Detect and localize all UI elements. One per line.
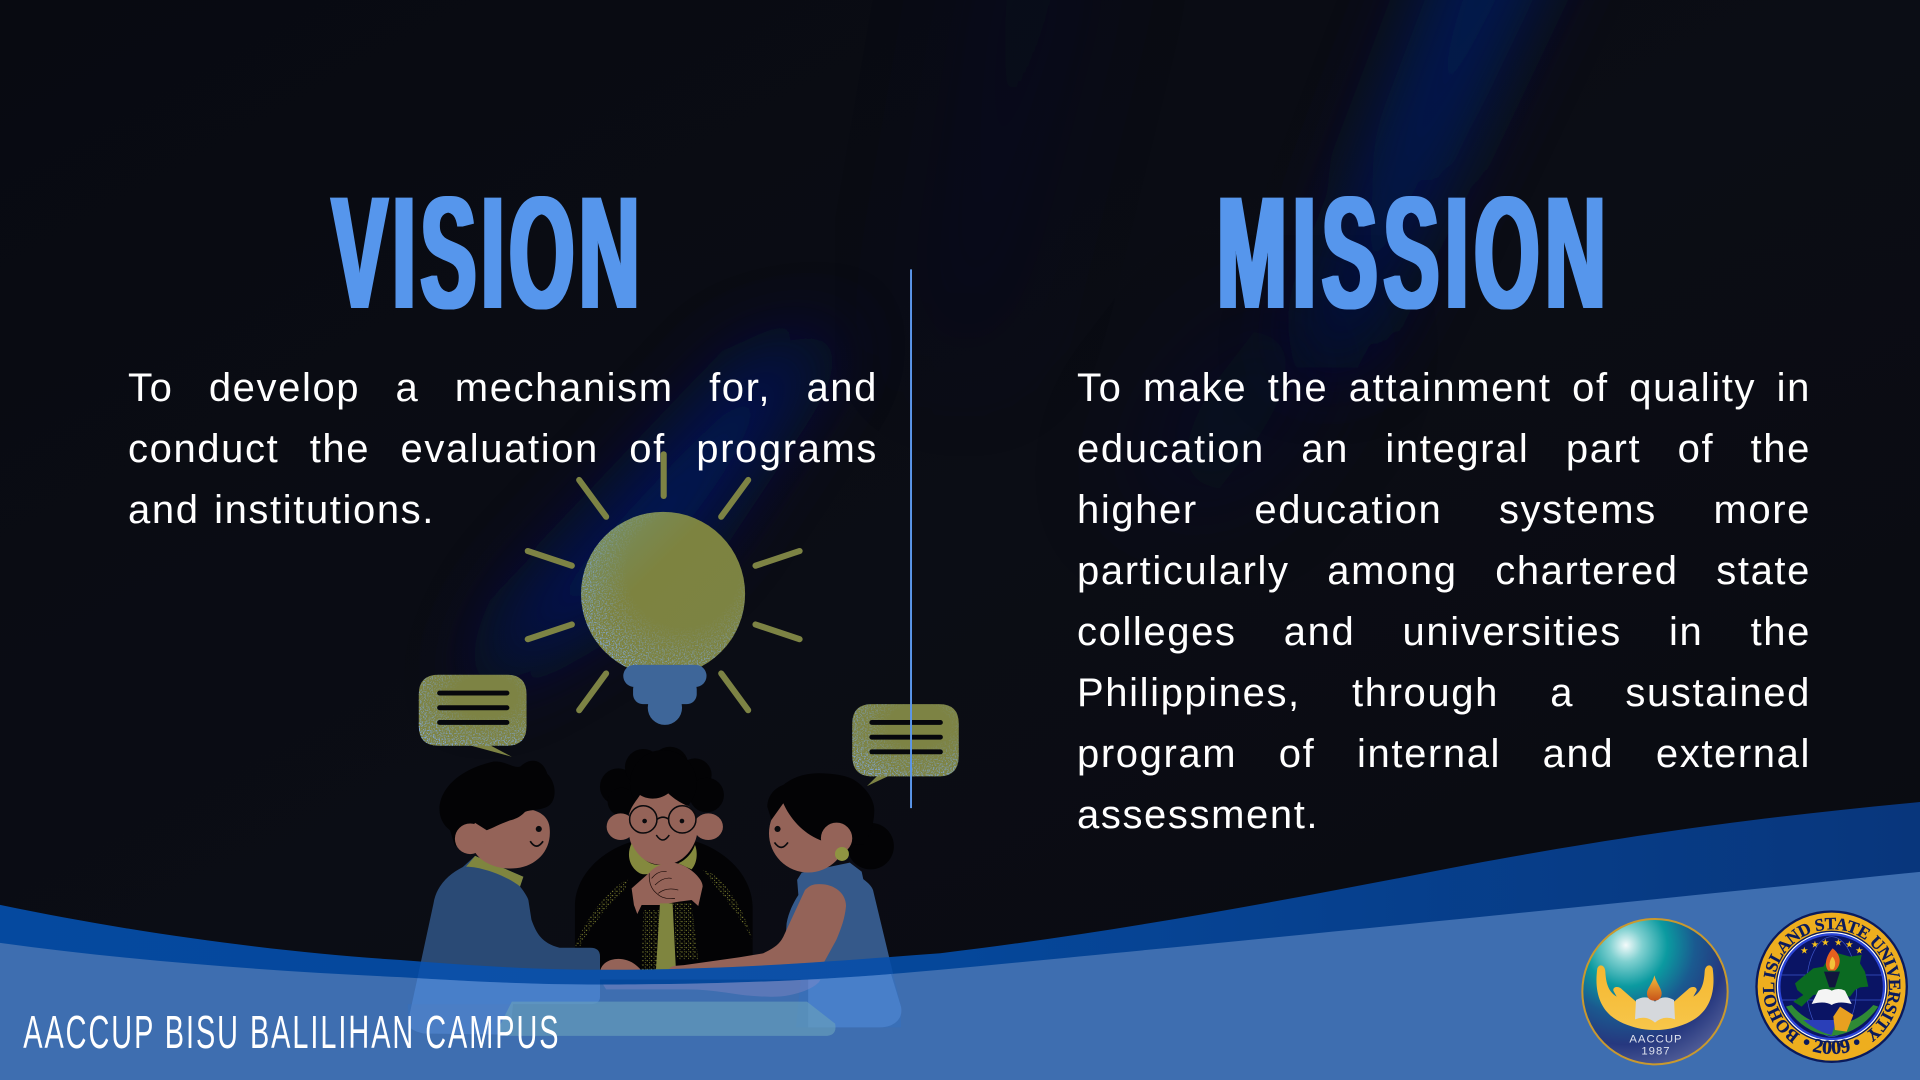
wave: light blue front <box>0 872 1920 1080</box>
seal stars: ★ <box>1855 945 1863 956</box>
seal stars: ★ <box>1845 940 1853 951</box>
heading: vision: VISION <box>332 164 639 343</box>
seal stars: ★ <box>1800 945 1809 956</box>
seal laurel and water <box>1786 1005 1878 1036</box>
arm overlay <box>600 980 820 997</box>
seal stars: ★ <box>1821 938 1829 949</box>
logo: AACCUP: 1987 <box>1641 1045 1671 1057</box>
speech bubble: left <box>419 675 527 757</box>
figure base: right <box>808 974 902 1028</box>
person: left, facing right <box>408 761 600 1035</box>
seal stars <box>1800 938 1863 956</box>
text block: mission statement: program of internal and external <box>1077 732 1811 776</box>
logo: Bohol Island State University seal <box>1755 910 1908 1063</box>
illustration: light bulb <box>528 454 800 725</box>
icon: bulb rays <box>528 454 800 710</box>
text block: mission statement: colleges and universities in the <box>1077 610 1811 654</box>
seal torch <box>1824 972 1840 987</box>
seal stars: ★ <box>1834 938 1842 949</box>
seal open book <box>1812 989 1852 1005</box>
figure base: left <box>408 978 600 1034</box>
icon: bulb glass <box>581 512 745 676</box>
logo caption: AACCUP <box>1629 1033 1683 1045</box>
book base <box>499 1002 836 1036</box>
illustration: parts seen through the light wave <box>408 974 902 1036</box>
seal stars: ★ <box>1811 940 1819 951</box>
seal year: • 2009 • <box>1804 1038 1860 1054</box>
text block: mission statement <box>1077 366 1811 837</box>
heading: mission: MISSION <box>1217 164 1606 343</box>
seal island <box>1793 953 1868 1007</box>
icon: bulb base <box>623 665 707 725</box>
person: centre with glasses <box>575 747 753 983</box>
text block: mission statement: assessment. <box>1077 793 1319 837</box>
text block: mission statement: To make the attainment of quality in <box>1077 366 1811 410</box>
icon: flame <box>1647 975 1662 1001</box>
text block: mission statement: particularly among chartered state <box>1077 549 1811 593</box>
illustration: parts seen through the dark wave <box>418 957 893 984</box>
text block: vision statement <box>128 366 878 532</box>
icon: gold hands <box>1596 965 1714 1030</box>
speech bubble: right <box>852 704 959 786</box>
divider line <box>910 269 912 808</box>
text block: mission statement: education an integral part of the <box>1077 427 1811 471</box>
artwork layer: illustration, waves, divider, logos, footer <box>0 269 1920 1080</box>
icon: open book <box>1635 997 1675 1023</box>
wave: dark blue back <box>0 802 1920 1080</box>
text block: vision statement: To develop a mechanism for, and <box>128 366 878 410</box>
text block: vision statement: and institutions. <box>128 488 435 532</box>
person: right, facing left <box>668 773 901 1027</box>
text block: mission statement: higher education systems more <box>1077 488 1811 532</box>
logo: AACCUP <box>1582 919 1728 1064</box>
seal globe lines <box>1782 937 1882 1037</box>
seal ring text: BOHOL ISLAND STATE UNIVERSITY <box>1762 918 1900 1044</box>
text block: mission statement: Philippines, through a sustained <box>1077 671 1811 715</box>
footer title: AACCUP BISU BALILIHAN CAMPUS <box>23 1007 558 1059</box>
text block: vision statement: conduct the evaluation of programs <box>128 427 878 471</box>
